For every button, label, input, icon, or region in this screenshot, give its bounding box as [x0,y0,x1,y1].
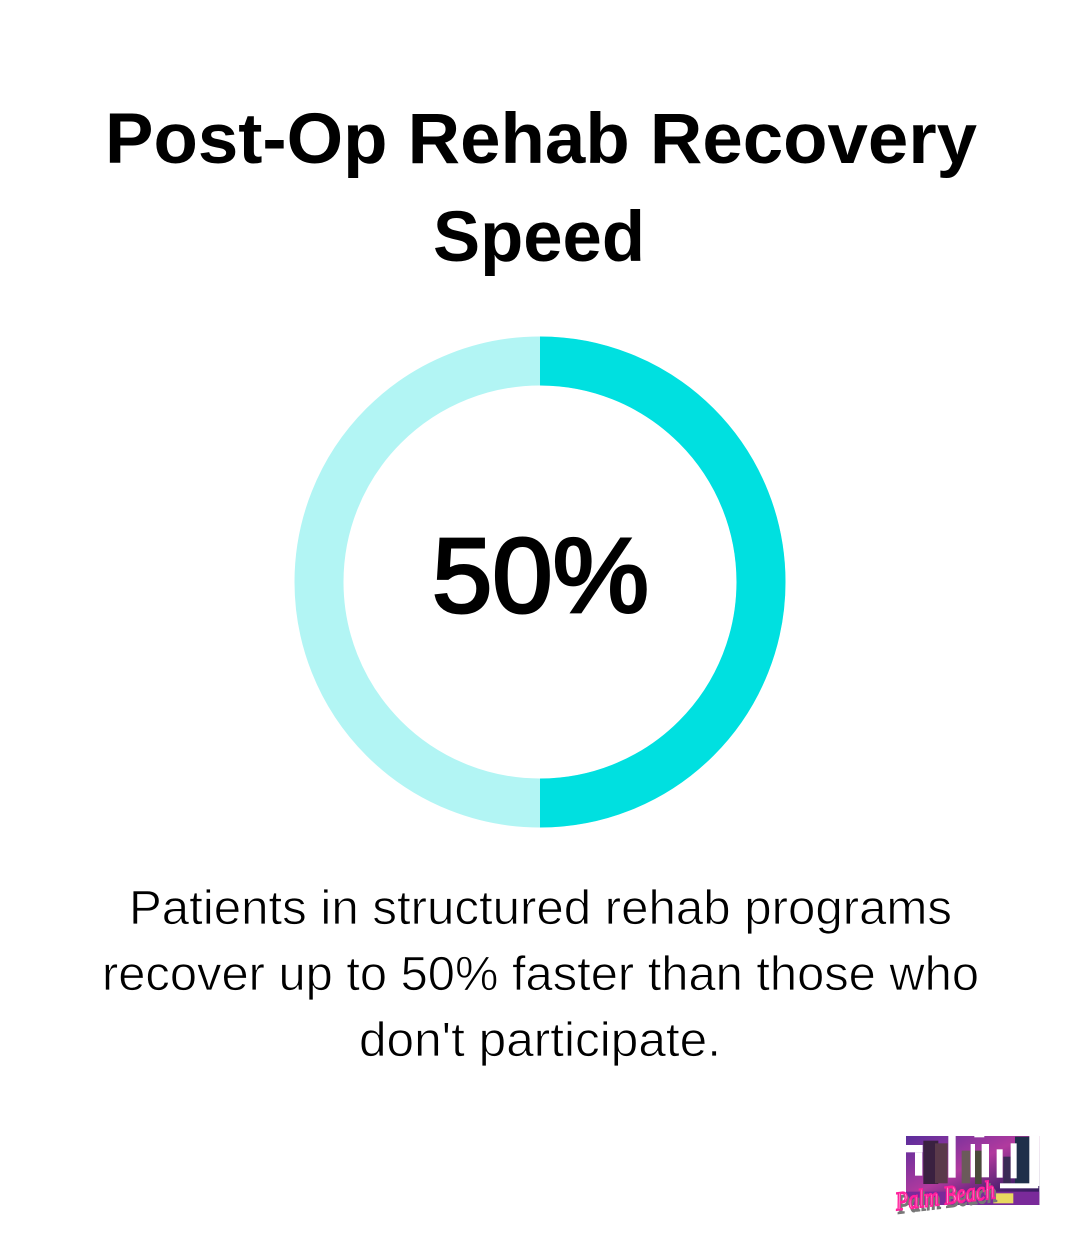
logo script: Palm Beach [893,1175,997,1216]
logo script: Palm Beach [895,1178,998,1219]
description text [102,882,979,1067]
title: Post-Op Rehab Recovery [105,100,978,179]
title [105,100,978,277]
title: Speed [433,198,645,277]
description text: Patients in structured rehab programs [129,882,952,935]
donut value: 50% [540,361,761,803]
donut track [319,361,761,803]
donut chart [319,361,761,803]
logo: Amity Palm Beach [893,1131,1039,1220]
logo photo background [906,1136,1039,1205]
description text: don't participate. [359,1014,721,1067]
description text: recover up to 50% faster than those who [102,948,979,1001]
logo letterforms [906,1131,1039,1188]
center value: 50% [432,517,649,635]
